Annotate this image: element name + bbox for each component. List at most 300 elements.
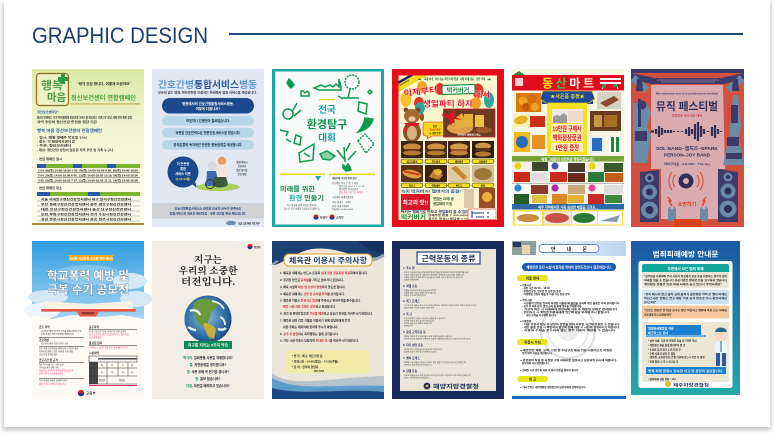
section 1: · 시설물의 안전을 위하여 지정된 이용자 외 출입을 금하며 개인 물품은 각자 관리합니다. xyxy=(522,301,620,305)
slogan: 환경 만들기 xyxy=(289,193,324,202)
left column: 문화 조성을 위한 공모전을 개최합니다 xyxy=(41,332,74,336)
exercise sections: 8. 덤벨 운동 xyxy=(403,369,418,373)
speech circle: 통합 xyxy=(180,166,186,171)
rule list: 사용 후에는 제자리에 정리해 주시기 바랍니다. xyxy=(283,324,339,329)
rule list: 4. 체육관 내에서는 금연 및 음식물 취식을 삼가합니다. xyxy=(280,291,345,296)
snack labels row 2 xyxy=(401,183,494,188)
checklist xyxy=(648,338,705,364)
yellow gift panel: 백화점상품권 xyxy=(552,133,582,142)
poster 1: mental health campaign: 정신보건센터란? xyxy=(37,109,59,114)
poster 1: mental health campaign: 행복 xyxy=(41,78,63,92)
blue strip xyxy=(512,204,624,210)
speech circle: (4.15.10일) xyxy=(176,176,190,181)
checklist: • 수상한 문자 링크 누르지 말 것 xyxy=(648,348,681,352)
poster 4: burger birthday party: 단체주문 환영 T. 000-0000 xyxy=(428,213,469,217)
corner banner xyxy=(398,76,427,92)
exercise sections: 20회씩 3세트 반복 xyxy=(404,278,419,282)
venue table: 인천 부평구정신건강복지센터 경기 수원시정신건강센터 xyxy=(41,212,132,216)
right column: 최 xyxy=(101,363,103,367)
poster 1: mental health campaign: 정신보건센터는 지역 주민들에게 정신건강 서비스를 제공하는 기관으로 상담 사례 관리 재활 운영 xyxy=(37,116,133,120)
poster 9: gym use precautions xyxy=(272,241,384,399)
rule list: 5. 체육관 이용시 안전사고 발생에 주의하고 안전수칙을 준수합니다. xyxy=(280,298,361,302)
slogan: 지구 환경과 미래 사회를 생각하는 xyxy=(287,203,317,207)
bear xyxy=(403,108,424,142)
exercise sections: 호흡은 내려갈 때 들이마시고 올라올 때 내쉬며 허리가 처지지 않도록 합니다 xyxy=(404,275,463,279)
contest title: 학교폭력 예방 및 xyxy=(47,268,129,282)
exercise sections: 바벨을 어깨너비로 잡고 등을 곧게 폅니다 xyxy=(404,288,436,292)
info box: * 종 목 : 배구, 배드민턴 등 xyxy=(292,354,323,358)
poster 1: mental health campaign: · 대상: 정신건강 상담이 필요한 지역 주민 및 가족 누구나 xyxy=(37,148,114,152)
poster 2: integrated nursing care service: 병원 입원시 xyxy=(236,160,248,164)
navy question pill: 어떻게 다릅니까? xyxy=(196,106,220,111)
police logo xyxy=(665,381,709,388)
schedule table: 1 04. 06(목) 14:00-16:00 5 05. 30(목) 14:00-16:00 9 09. 26(목) 14:00-16:00 xyxy=(38,168,139,172)
bottom products xyxy=(513,210,623,226)
info box: 000-7965 xyxy=(314,370,325,373)
doodle ring xyxy=(280,75,374,171)
right column: 40 xyxy=(131,372,134,374)
exercise sections: 3. 레그 프레스 xyxy=(403,299,420,303)
snack labels row 2: 핫도그 xyxy=(409,183,416,187)
product photos xyxy=(513,92,622,153)
logo box: 떡커버거 xyxy=(447,86,470,94)
orange sponsor text: 소방하기 xyxy=(678,201,697,208)
right speaker xyxy=(718,169,738,222)
blue pill: 해양안전 증진 시설 이용자를 위하여 알려드리오니 협조바랍니다. xyxy=(526,264,612,270)
left column: 문의 교육부 학교생활문화과 xyxy=(39,372,63,376)
contest details: 참가대상: 전국 초·중·고 학생 xyxy=(332,181,358,185)
right column: 기타 학교폭력 관련 기관의 종사자도 참여 가능 xyxy=(89,332,129,336)
poster 4: burger birthday party: ★ 회이 수능카이탕 까마동 류직 ★ xyxy=(417,77,492,81)
contest details: 시상내역: 환경부장관상 xyxy=(332,195,353,199)
exercise sections: 무릎에 무리가 가지 않도록 천천히 합니다 xyxy=(404,350,436,354)
police officer xyxy=(714,328,728,366)
right column: 10 xyxy=(101,372,104,374)
white panel: 개인정보 유출로 인한 피해 사례가 늘고 있으니 주의하세요" xyxy=(644,282,722,286)
green strip: 매월 그대들의 식탁위를 책임지겠습니다. xyxy=(541,156,595,161)
section 1: · 개인 물품 분실 시 책임지지 않으며 단체 사용 시 사전에 신청하시기 바랍니다. xyxy=(522,325,620,329)
left column: 공모기간 및 규격 xyxy=(39,358,58,362)
poster 2: integrated nursing care service: 보건복지부 xyxy=(238,220,260,226)
poster 1: mental health campaign: 지역 주민의 정신건강 증진을 위한 기관 xyxy=(37,120,98,124)
main title: 전국 xyxy=(318,105,336,116)
poster 1: mental health campaign xyxy=(32,69,144,227)
section 1: ● 이용시간 xyxy=(520,283,532,287)
speech bubble: ★ 세트무료 xyxy=(429,131,442,135)
section 1: ● 이용방법 xyxy=(520,319,532,323)
snack labels row 2: 피자 xyxy=(481,183,486,187)
contest details: 주최: 환경부 · 교육부 xyxy=(332,200,351,204)
police logo xyxy=(424,382,479,390)
white panel: 피해 발생 즉시 은행에 연락" xyxy=(644,312,672,316)
ribbon: 건강한 학교문화 조성을 위한 제6회 xyxy=(69,256,113,261)
white panel: 의심스러운 전화는 끊고 해당 기관 공식 번호로 다시 확인하세요 xyxy=(644,296,728,300)
snack labels row 2: 치킨세트 xyxy=(432,183,441,187)
blue notice callout 2 xyxy=(646,367,726,374)
right column: 초 중 고등학교 학생, 학부모 및 교원 일반인 xyxy=(89,330,126,334)
slogan: 청소년 전국 환경탐구대회에 초대합니다 xyxy=(284,206,320,210)
exercise sections: 5. 팔굽 근력운동 등 xyxy=(403,330,426,334)
right column: 30 xyxy=(122,372,125,374)
poster 2: integrated nursing care service: 필요 없어요 xyxy=(236,168,248,172)
yellow gift panel: ★사은품 증정★ xyxy=(550,93,585,100)
title box xyxy=(284,254,372,266)
navy question pill: 병원에서의 간호간병통합서비스병동, xyxy=(182,101,234,106)
poster 2: integrated nursing care service: 간호간병통합서비스는 환자와 보호자 모두가 만족하는 xyxy=(175,206,242,210)
checklist: 경찰청, 금융감독원, 은행 기관에 반드시 확인 후 결정 xyxy=(650,355,705,359)
left column xyxy=(39,325,84,386)
white panel: 주변에서 보는 범죄 피해 xyxy=(667,266,704,271)
burger labels row 1: 더블버거 xyxy=(479,159,487,163)
section 1: · 이용자 수칙을 준수하지 않는 경우 이용이 제한될 수 있습니다. xyxy=(522,328,616,332)
poster 4: burger birthday party: 떡커는 햄버거로 맛보고 생일파티 할 수 있다 xyxy=(401,209,469,214)
poster 4: burger birthday party: 생일파티 드립 xyxy=(433,201,452,206)
poster 7: school violence essay contest xyxy=(24,241,152,399)
poster 10: strength exercise types xyxy=(392,241,504,399)
exercise sections: 복부에 힘을 주고 천천히 내려옵니다 xyxy=(404,321,432,325)
title box: 체육관 이용시 주의사항 xyxy=(289,255,367,265)
right column: 시상내역 xyxy=(89,351,99,355)
slogan xyxy=(178,254,238,288)
balloons xyxy=(400,81,494,114)
speech circle xyxy=(168,156,198,188)
navy question pill xyxy=(162,98,254,114)
contest title xyxy=(47,268,129,296)
poster 1: mental health campaign: · 주관: 정신보건센터 xyxy=(37,144,72,148)
white panel: "문자 메시지 링크 클릭 금지 출처가 불분명한 URL은 열지 마세요 xyxy=(644,292,728,296)
section 1: · 이용 신청서 작성 후 담당자 확인을 받아 지정된 시간에 이용할 수 있습니다. xyxy=(522,322,620,326)
globe xyxy=(184,296,232,342)
venue table: 서울 서대문구정신건강복지센터 대구 달서구정신건강센터 xyxy=(41,197,132,201)
section 1: · 이용방법 신청서 제출 후 이용 가능 전화 문의 xyxy=(522,292,570,296)
clouds xyxy=(24,265,152,319)
light blue pills: 보호자나 간병인이 필요없습니다. xyxy=(186,118,230,123)
exercise sections: 반복합니다 xyxy=(404,324,413,328)
burger grid row 1 xyxy=(401,141,494,158)
band names xyxy=(656,145,719,166)
rule list: 1. 체육관 내에서는 반드시 운동화 실내 전용 운동화를 착용하여야 합니다. xyxy=(280,270,368,275)
checklist: • 피해 발생 시 즉시 신고할 것 xyxy=(648,360,679,364)
promises: 물. 자연환경을 생각합니까? xyxy=(190,362,226,367)
food photo xyxy=(442,109,495,137)
police logo: 제주지방경찰청 xyxy=(673,381,709,388)
top wave xyxy=(272,241,384,265)
white panel: "모르는 번호로 온 입금 요구는 일단 의심하고 경찰에 바로 신고 하세요 xyxy=(644,308,728,312)
exercise sections xyxy=(403,266,477,380)
right column: 장관상 xyxy=(99,378,105,382)
poster 4: burger birthday party xyxy=(392,69,504,227)
blue notice callout 1 xyxy=(646,325,706,337)
contest details: 전화번호 02-000-0000 xyxy=(332,207,354,211)
poster 4: burger birthday party: 경기도 화성시 봉담읍 0-00 xyxy=(428,216,469,220)
contest details: 필수 제출 서류 탐구계획서 xyxy=(339,190,363,194)
festival title xyxy=(656,92,718,118)
contest details: 대회주제: 지구를 위한 탐구 xyxy=(332,176,357,180)
blue strip: 매주 지역에서의 가장 싱싱한 제품을 드려요... xyxy=(538,204,598,209)
section 1 xyxy=(517,275,620,332)
contest title: 극복 수기 공모전 xyxy=(47,282,129,296)
right column: 발표일 결과 xyxy=(89,341,103,345)
exercise sections: 기구에 앉아 발판을 밀어 다리 근육을 강화하는 운동으로 무릎이 완전히 펴지지 않도록 합니다 xyxy=(404,303,477,307)
exercise sections: 양손에 덤벨을 들고 어깨 높이에서 위로 밀어 올리는 운동으로 어깨 근육을 강화합니다 xyxy=(404,373,471,377)
section 2: ● 정해진 시간 준수와 사용 후 정리 정돈을 철저히 합니다. xyxy=(520,368,579,372)
contest details: 접수방법 온라인 접수 xyxy=(339,187,358,191)
poster 2: integrated nursing care service: 안심 병원 xyxy=(237,172,247,176)
exercise sections: 상완 이두근을 강화하는 운동으로 15회씩 3세트를 반복합니다 무리하지 않도록 합니다 xyxy=(404,336,471,340)
exercise sections: 보조자와 함께 안전하게 진행합니다 xyxy=(404,362,432,366)
top strip xyxy=(512,241,626,256)
waveform xyxy=(651,122,721,141)
exercise sections: 허리에 무리가 가지 않도록 주의합니다 xyxy=(404,318,434,322)
band names: PERSON–JOY BAND xyxy=(664,152,711,158)
poster 2: integrated nursing care service: 보호자가 xyxy=(238,164,247,168)
green strip xyxy=(512,156,624,162)
left column: 공모대상 xyxy=(39,338,49,342)
burger labels row 1: 불고기버거 xyxy=(407,159,417,163)
header band: 동산마트 xyxy=(542,76,594,90)
exercise sections: 호흡을 유지하며 반복합니다 xyxy=(404,293,426,297)
slogan: 지구는 xyxy=(194,254,223,266)
right column: 수상자는 10월 중 개별 통보 및 홈페이지 공지 xyxy=(89,346,128,350)
section 1: · 안전사고 시 책임은 이용자에게 있으며 담당 부서에 즉시 알립니다. xyxy=(522,310,610,314)
rule list: 6. 경기 전 준비운동으로 부상을 예방하고 상호간 안전을 지켜주시기 바랍니다. xyxy=(280,310,373,316)
ministry logo xyxy=(78,390,96,396)
venue table: 대전 유성구정신건강복지센터 울산 남구정신건강센터 xyxy=(41,207,132,211)
section 1: 이용 안내 xyxy=(526,276,539,281)
white panel: 피해를 입을 수 있습니다 공공기관은 절대로 돈을 요구하지 않습니다 xyxy=(644,278,728,282)
burger labels row 1 xyxy=(401,159,494,164)
title box: 근력운동의 종류 xyxy=(422,253,476,263)
speech bubble xyxy=(423,122,447,139)
exercise sections: 의자에 앉아 다리를 앞으로 펴 올리는 운동입니다 xyxy=(404,347,442,351)
left column: 제출 서류는 반환되지 않습니다 xyxy=(39,382,66,386)
section 3: 비 고 xyxy=(529,377,536,382)
top strip: 안 내 문 xyxy=(551,246,587,253)
contest details: 문의: 환경교육센터 xyxy=(332,204,349,208)
best taste red box: 최고의 맛!! xyxy=(403,198,429,206)
exercise sections: 덤벨을 양손에 쥐고 팔꿈치를 고정한 채 들어 올렸다 내립니다 xyxy=(404,334,452,338)
venue table: 강원 춘천시정신건강복지센터 충북 청주시정신건강센터 xyxy=(41,217,132,221)
rule list: 2. 경기장 안으로 음식물을 가지고 들어가지 못합니다. xyxy=(280,277,344,282)
left column: 공모 주제 학교폭력을 예방하거나 극복한 경험 xyxy=(39,346,78,350)
exercise sections: 누운 자세에서 무릎을 구부리고 상체를 들어 올립니다 xyxy=(404,316,446,320)
schedule table: 3 05. 09(목) 14:00-16:00 7 07. 11(목) 14:00-16:00 11 11. 14(목) 14:00-16:00 xyxy=(38,178,139,182)
title box xyxy=(417,252,480,264)
poster 8: earth is our precious home xyxy=(152,241,264,399)
venue table: 부산 동래구정신건강복지센터 광주 광산구정신건강센터 xyxy=(41,202,132,206)
poster 2: integrated nursing care service: 간호간병통합서비스병동 xyxy=(158,79,257,91)
poster grid xyxy=(24,69,744,399)
speech bubble: "Good-Sol" xyxy=(429,130,441,132)
schedule table: 2 04. 20(목) 14:00-16:00 6 06. 13(목) 14:00-16:00 10 10. 24(목) 14:00-16:00 xyxy=(38,174,139,178)
contest details: 접수기간 2024. 5. 1 - 6. 15 xyxy=(339,184,365,188)
illustration: nurse and patient xyxy=(196,157,240,191)
poster title: 범죄피해예방 안내문 xyxy=(652,250,719,258)
festival title: 뮤직 페스티벌 xyxy=(656,99,718,113)
food photo: 떡커버거 생일파티 메뉴 xyxy=(457,133,481,137)
exercise sections: 엎드린 자세에서 팔을 어깨너비로 벌리고 몸을 일직선으로 유지한 채 팔꿈치를 굽혀 xyxy=(404,270,469,274)
exercise sections: 벤치에 누워 바벨을 가슴까지 내렸다 밀어 올립니다 가슴과 삼두근을 강화합니다 xyxy=(404,360,466,364)
exercise sections: 7. 벤치 프레스 xyxy=(403,356,420,360)
poster 2: integrated nursing care service xyxy=(152,69,264,227)
section 2 xyxy=(517,339,617,372)
info box xyxy=(286,350,370,373)
yellow gift panel xyxy=(540,91,595,155)
blue notice callout 1: 체크리스트 안내 xyxy=(648,330,668,335)
right column: 공모 방법 참조 xyxy=(89,336,102,340)
best taste red box xyxy=(401,194,430,210)
yellow gift panel: 10만원 구매시 xyxy=(552,124,582,133)
exercise sections: 2. 바벨 운동 xyxy=(403,284,418,288)
poster 11: notice xyxy=(512,241,626,399)
poster 3: national environment contest xyxy=(272,69,384,227)
rule list xyxy=(280,270,373,342)
poster 1: mental health campaign: 정신보건센터 연합캠페인 xyxy=(71,94,136,102)
blue notice callout 2: 범죄 피해 발생시 신속한 신고 및 상담이 필요합니다 xyxy=(648,369,723,373)
poster 2: integrated nursing care service: 보호자 없는 병원, 환자안전을 보장하는 환경에서 입원 서비스를 제공합니다. xyxy=(158,90,257,94)
festival title: 음악으로 하나 되는 대전 xyxy=(672,112,702,118)
section 2: ● 해양안전 체험, 교육, 시험 및 수난구조 등을 위한 시설이므로 지정된 xyxy=(520,348,613,352)
slogan: 미래를 위한 xyxy=(280,184,315,193)
police logo: 해양지방경찰청 xyxy=(433,382,479,390)
band names: 야외무대홀 · 9 BAND · The sky xyxy=(664,162,711,166)
left speaker xyxy=(640,170,659,222)
speech circle: 더 든든한 xyxy=(177,161,189,166)
section 2: 담당자와 사전 협의합니다. xyxy=(522,361,550,365)
section 2: 목적 외의 이용을 제한합니다. xyxy=(522,351,553,355)
left column: 기타 자세한 내용은 홈페이지 참고 xyxy=(39,378,68,382)
logos: 교육부 xyxy=(336,216,344,220)
map box xyxy=(468,209,496,220)
main title: 환경탐구 xyxy=(307,117,347,131)
poster 1: mental health campaign: "생각 건강 합니다, 어떻게 오셨어요" xyxy=(77,81,131,86)
checklist: • 주변 사람과 상의 후 결정 xyxy=(648,352,676,356)
poster 12: crime victim prevention notice: • 범죄피해 상담 전화 : 112 xyxy=(648,377,676,381)
info box: * 문 의 : 경비과 담당자 xyxy=(292,365,319,369)
section 1: · 음주 후 이용 금지, 흡연 금지 및 장내 정숙을 유지합니다. xyxy=(522,304,582,308)
left column: 접수기간 8월 1일 - 9월 30일 xyxy=(39,362,64,366)
right column: 20 xyxy=(111,372,114,374)
logos: 환경부 xyxy=(320,216,328,220)
orange sponsor text xyxy=(668,197,706,208)
green banner xyxy=(184,341,232,349)
main title xyxy=(307,99,347,144)
promises: 다짐. 자연을 배려하고 있습니까? xyxy=(186,383,230,388)
checklist: • 개인정보 등을 쉽게 알려주지 말 것 xyxy=(648,343,686,347)
rocker hands xyxy=(668,206,708,227)
white panel: "공무원을 사칭하며 우리 사회가 이곳에서 공금 등을 이용하는 경우가 있어 xyxy=(644,274,727,278)
left column: 유의사항 공모작은 창작물이어야 합니다 xyxy=(39,368,73,372)
exercise sections: 가슴이 바닥에 닿을 듯 내려갔다가 올라오는 운동으로 상체 근력을 강화합니다 xyxy=(404,272,465,276)
rule list: 3. 체육 시설의 파손 및 손상이 발생하지 않도록 합니다. xyxy=(280,284,346,289)
right column: 원장상 xyxy=(119,378,125,382)
speech bubble: 특선 xyxy=(433,124,437,128)
promises xyxy=(183,355,233,388)
poster 1: mental health campaign: · 장소: 각 행정복지센터 앞 xyxy=(37,140,76,144)
green banner: 지구를 지키는 5가지 약속 xyxy=(188,342,229,348)
poster 4: burger birthday party: 이제부터 xyxy=(403,84,438,98)
ministry logo: 교육부 xyxy=(86,391,96,396)
rule list: 7. 체육관 내의 각종 기물을 이용하기 전에 담당자에게 문의 xyxy=(280,318,350,322)
poster 1: mental health campaign: 마음 xyxy=(47,91,66,104)
exercise sections: 무게는 자신에게 맞게 조절합니다 xyxy=(404,376,430,380)
rule list: 체육 시설 사용 후에는 정리하고 퇴실합니다. xyxy=(283,304,336,308)
truss xyxy=(631,69,744,93)
logo box xyxy=(442,84,475,95)
poster 6: music festival xyxy=(631,69,744,227)
poster 1: mental health campaign: 행복 마음 정신보건센터 연합캠페인 xyxy=(37,127,102,133)
light blue pills: 숙련된 간호인력으로 전문간호서비스를 받습니다. xyxy=(175,130,241,135)
exercise sections: 6. 다리 쉐딩 운동 xyxy=(403,343,424,347)
venue table xyxy=(37,192,140,221)
side guitars xyxy=(633,95,744,165)
poster 1: mental health campaign: · 연합 캠페인 장소 xyxy=(37,185,62,190)
right column: 응모자격 xyxy=(89,325,99,329)
burger labels row 1: 치즈버거 xyxy=(432,159,440,163)
light blue pills: 환자분들의 독자적인 안전한 병동환경을 제공합니다. xyxy=(174,142,243,147)
poster 4: burger birthday party: 떡커버거 xyxy=(401,214,426,222)
logos xyxy=(313,214,344,220)
white panel xyxy=(638,261,732,388)
section 1: · 휴일(토요일, 일요일 및 공휴일) 휴관 xyxy=(522,289,562,293)
schedule table xyxy=(37,164,140,182)
slogan: 터전입니다. xyxy=(181,276,235,288)
white panel: 보이스피싱" xyxy=(644,300,656,304)
festival title: We welcome you to a joyful music festival xyxy=(656,92,718,96)
blue pill xyxy=(522,263,616,271)
promises: 빛. 쓸모 없습니까? xyxy=(195,376,221,381)
right column: 우 xyxy=(111,363,113,367)
exercise sections: 1. 푸시 업 xyxy=(403,266,415,270)
rule list: 8. 음주 후 출입이나 폭력행위는 절대 금지합니다. xyxy=(280,331,339,336)
section 1: 사전 교육을 이수해야 합니다. xyxy=(526,313,557,317)
snack grid row 2 xyxy=(401,165,494,182)
exercise sections: 하체 근력을 키우며 15회씩 3세트 반복 xyxy=(404,306,434,310)
stage frame xyxy=(651,85,725,219)
left column: 공모 방법 온라인 접수 xyxy=(39,352,58,356)
poster 4: burger birthday party: 에서 xyxy=(475,89,490,99)
poster 5: dongsan mart flyer xyxy=(512,69,624,226)
left column: 학교폭력 예방 및 극복 수기를 통해 건강한 학교 xyxy=(41,329,81,333)
section 2: 이용시 수칙 xyxy=(524,340,541,345)
section 3: ● 기타 문의는 해양경찰청 해양안전과 담당자에게 연락바랍니다. xyxy=(520,385,586,389)
promises: 먹거리. 일회용품 사용을 자제합니까? xyxy=(183,355,233,360)
contest details xyxy=(332,176,365,211)
section 1: · 개방 시간 09:00 ~ 18:00 xyxy=(522,286,550,290)
poster 12: crime victim prevention notice xyxy=(631,241,740,395)
record emblem xyxy=(669,172,703,190)
slogan xyxy=(280,184,324,210)
poster 1: mental health campaign: · 연합 캠페인 일시 xyxy=(37,156,62,161)
heading rule xyxy=(229,33,743,35)
book xyxy=(41,301,136,317)
promises: 빛. 사용 후에 꼭 전기를 끕니까? xyxy=(187,369,229,374)
bottom wave xyxy=(272,373,384,399)
exercise sections: 무릎을 살짝 구부린 상태로 들어 올립니다 xyxy=(404,290,436,294)
poster 4: burger birthday party: 속이 떡커버거! 햄버거의 품질! xyxy=(401,188,461,194)
band names: SOL BAND–햄치즈–SPARK xyxy=(656,145,719,152)
product rows xyxy=(512,162,624,204)
corner banner: Birthday xyxy=(398,78,410,87)
rule list: 9. 기타 시설 이용시 담당자의 안내와 지시를 따라주시기 바랍니다. xyxy=(280,338,359,342)
watermark seal xyxy=(541,304,595,358)
heading: GRAPHIC DESIGN: GRAPHIC DESIGN xyxy=(32,23,208,48)
exercise sections: 4. 복 근 xyxy=(403,312,412,316)
ribbon xyxy=(68,255,114,261)
checklist: • 낯선 사람, 기관 등 전화로 돈을 요구하면 의심 xyxy=(648,338,697,342)
right column xyxy=(89,325,137,386)
light blue pills xyxy=(162,116,254,150)
